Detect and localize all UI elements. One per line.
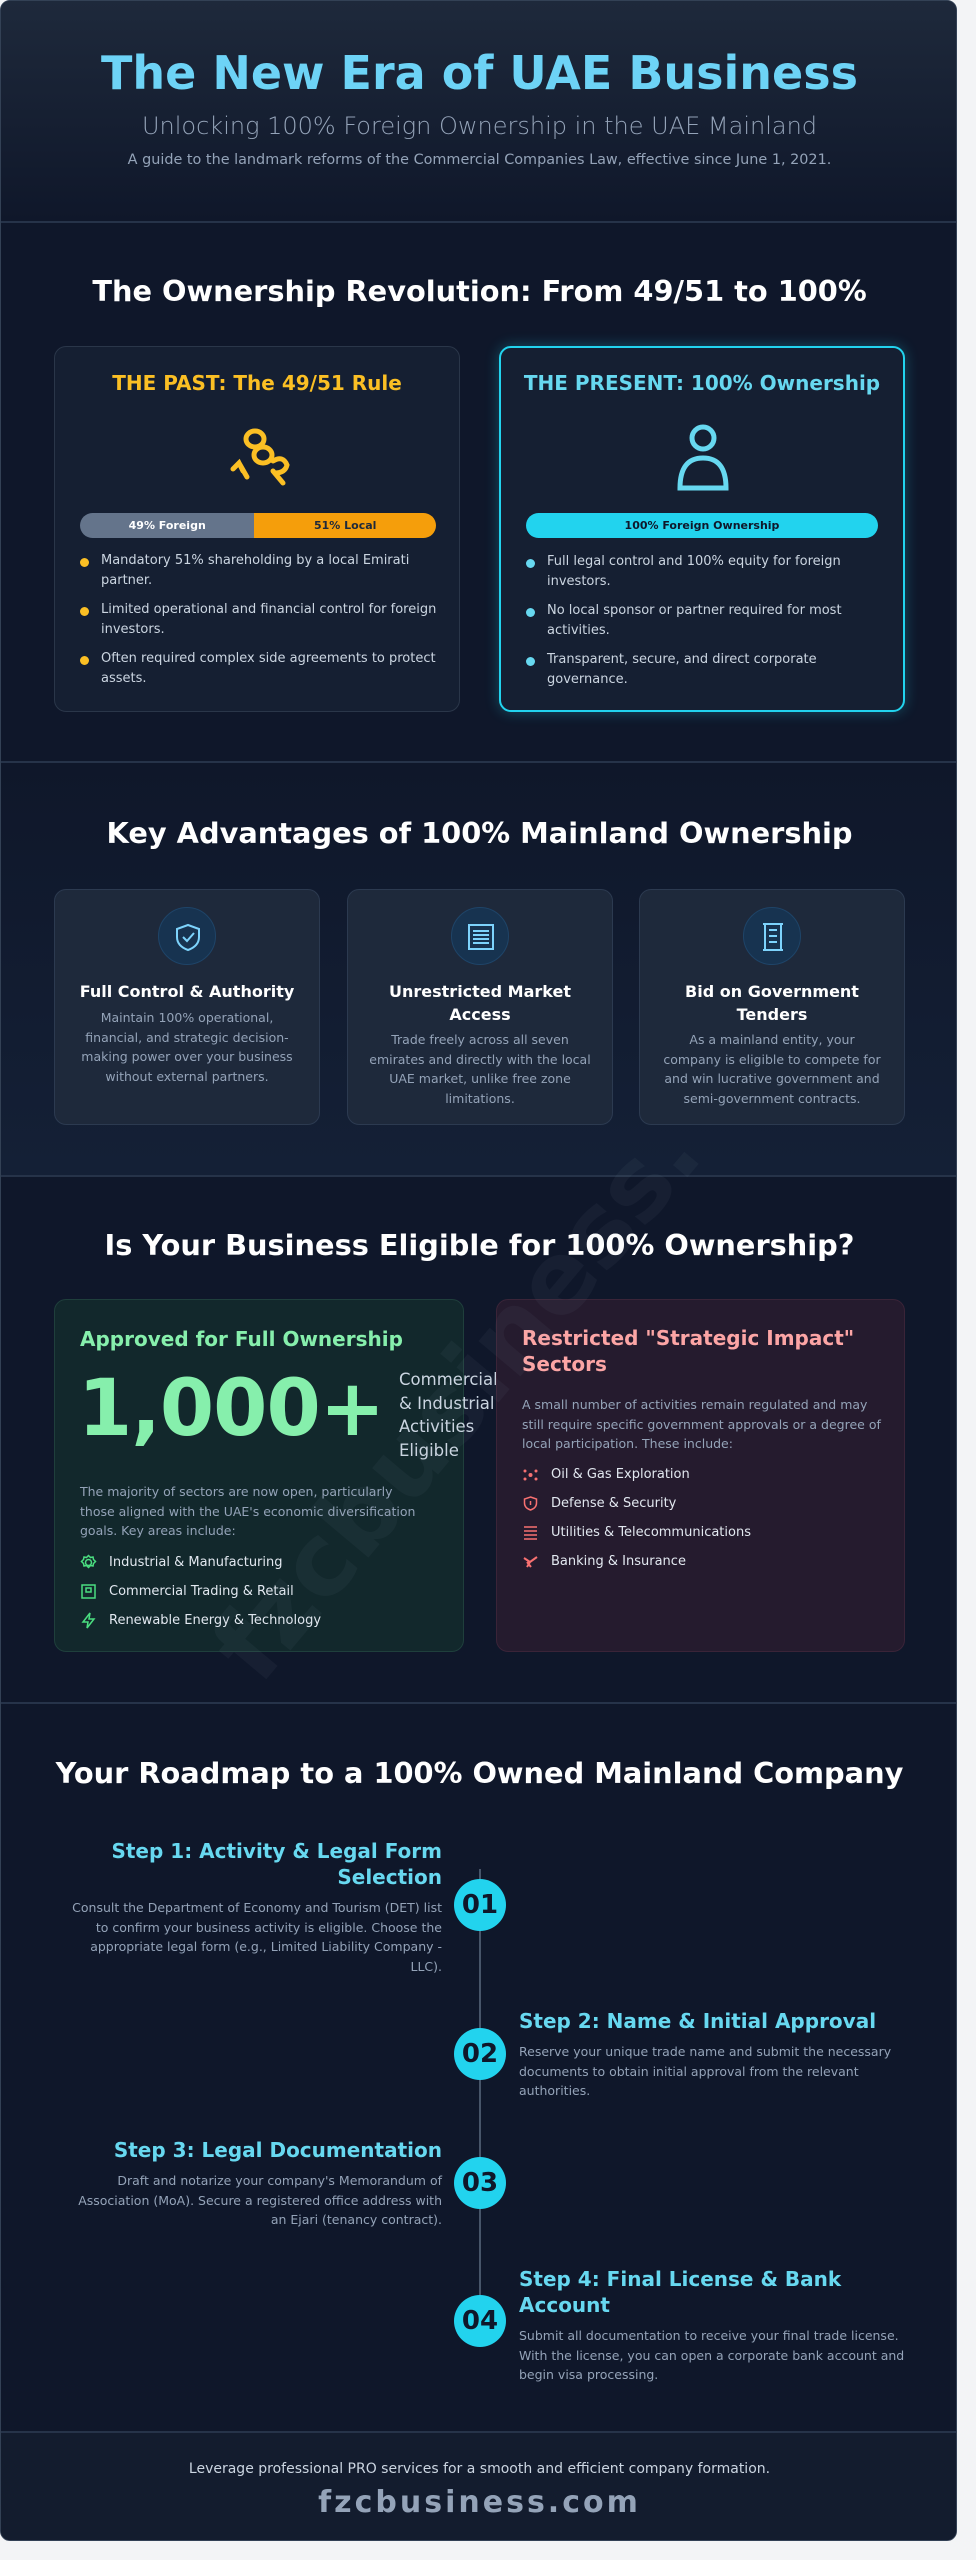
title: The New Era of UAE Business [101,46,858,100]
panel: approved: Eligible [399,1440,459,1460]
footer: Leverage professional PRO services for a smooth and efficient company formation. [189,2461,770,2477]
approved list: Renewable Energy & Technology [109,1613,321,1628]
bar: 100% [526,513,878,538]
icon: person [678,424,728,490]
heading: Key Advantages of 100% Mainland Ownership [107,816,852,850]
timeline line [479,1869,481,2299]
brand: fzcbusiness.com [318,2485,641,2520]
panel: approved: Commercial [399,1370,498,1389]
restricted list: Oil & Gas Exploration [551,1467,690,1482]
approved list: Industrial & Manufacturing [109,1555,283,1570]
panel: restricted: A small number of activities remain regulated and may still require specific government approvals or a degree of local participation. These include: [522,1397,881,1451]
step 4: Submit all documentation to receive your final trade license. With the license, you can open a corporate bank account and begin visa processing. [519,2328,904,2382]
section: roadmap [1,1704,958,2433]
step 3 [78,2138,442,2227]
step 2 marker: 02 [462,2039,498,2069]
present bullets [526,554,842,687]
step 3: Step 3: Legal Documentation [114,2138,442,2162]
step 2 marker [454,2028,506,2080]
bar: 49/51: 51% Local [314,519,376,532]
section: eligibility [1,1177,958,1704]
step 1: Consult the Department of Economy and Tourism (DET) list to confirm your business activity is eligible. Choose the appropriate legal form (e.g., Limited Liability Company - LLC). [72,1900,442,1974]
panel: approved: Activities [399,1417,474,1436]
card: full control: Maintain 100% operational, financial, and strategic decision-making power over your business without external partners. [81,1010,293,1084]
past bullets [80,553,436,686]
bar: 49/51 [80,513,436,538]
past bullets: Mandatory 51% shareholding by a local Emirati partner. [101,553,409,588]
icon: shield [158,907,216,965]
heading: The Ownership Revolution: From 49/51 to 100% [92,274,867,308]
card: market access: Trade freely across all seven emirates and directly with the local UAE market, unlike free zone limitations. [369,1032,591,1106]
present bullets: Full legal control and 100% equity for foreign investors. [547,554,841,589]
card: tenders: Bid on Government Tenders [685,982,859,1024]
present bullets: No local sponsor or partner required for most activities. [547,603,842,638]
card: market access [347,889,613,1125]
header [1,1,958,223]
intro text: A guide to the landmark reforms of the Commercial Companies Law, effective since June 1, 2021. [128,152,831,168]
icon: list [451,907,509,965]
card: market access: Unrestricted Market Access [389,982,571,1024]
panel: past [54,346,460,712]
footer [1,2433,958,2542]
card: full control: Full Control & Authority [80,982,294,1001]
panel: restricted [496,1299,905,1652]
step 4: Step 4: Final License & Bank Account [519,2267,841,2317]
step 2: Reserve your unique trade name and submit the necessary documents to obtain initial approval from the relevant authorities. [519,2044,891,2098]
step 3: Draft and notarize your company's Memorandum of Association (MoA). Secure a registered office address with an Ejari (tenancy contract). [78,2173,442,2227]
step 4 [519,2267,904,2382]
step 1: Step 1: Activity & Legal Form Selection [111,1839,442,1889]
panel: restricted: Restricted "Strategic Impact" Sectors [522,1326,854,1376]
step 2 [519,2009,891,2098]
restricted list: Utilities & Telecommunications [551,1525,751,1540]
section: ownership revolution [1,223,958,763]
present bullets: Transparent, secure, and direct corporate governance. [547,652,817,687]
card: tenders: As a mainland entity, your company is eligible to compete for and win lucrative government and semi-government contracts. [663,1032,881,1106]
step 3 marker [454,2157,506,2209]
bar: 49/51: 49% Foreign [129,519,206,532]
big number: 1,000+ [78,1364,384,1454]
watermark: fzcbusiness. [188,1096,724,1703]
step 4 marker [454,2295,506,2347]
panel: approved: & Industrial [399,1394,494,1412]
step 1 [72,1839,442,1974]
step 4 marker: 04 [462,2306,498,2336]
approved list: Commercial Trading & Retail [109,1584,294,1599]
past title: THE PAST: The 49/51 Rule [112,371,402,395]
past bullets: Limited operational and financial control for foreign investors. [101,602,436,637]
icon: document [743,907,801,965]
panel: approved: The majority of sectors are now open, particularly those aligned with the UAE's economic diversification goals. Key areas include: [80,1484,415,1538]
bar: 100%: 100% Foreign Ownership [625,519,779,532]
card: tenders [639,889,905,1125]
panel: approved: Approved for Full Ownership [80,1327,403,1351]
restricted list: Defense & Security [551,1496,676,1511]
section: advantages [1,763,958,1177]
approved list [80,1554,321,1628]
step 2: Step 2: Name & Initial Approval [519,2009,876,2033]
present title: THE PRESENT: 100% Ownership [524,371,880,395]
panel: present [499,346,905,712]
heading: Is Your Business Eligible for 100% Ownership? [104,1228,854,1262]
step 3 marker: 03 [462,2168,498,2198]
heading: Your Roadmap to a 100% Owned Mainland Company [56,1756,903,1790]
step 1 marker: 01 [462,1890,498,1920]
card: full control [54,889,320,1125]
subtitle: Unlocking 100% Foreign Ownership in the UAE Mainland [142,112,817,140]
panel: approved [54,1299,464,1652]
restricted list: Banking & Insurance [551,1554,686,1569]
step 1 marker [454,1879,506,1931]
past bullets: Often required complex side agreements to protect assets. [101,651,436,686]
restricted list [524,1467,751,1569]
icon: broken chain [230,428,290,486]
